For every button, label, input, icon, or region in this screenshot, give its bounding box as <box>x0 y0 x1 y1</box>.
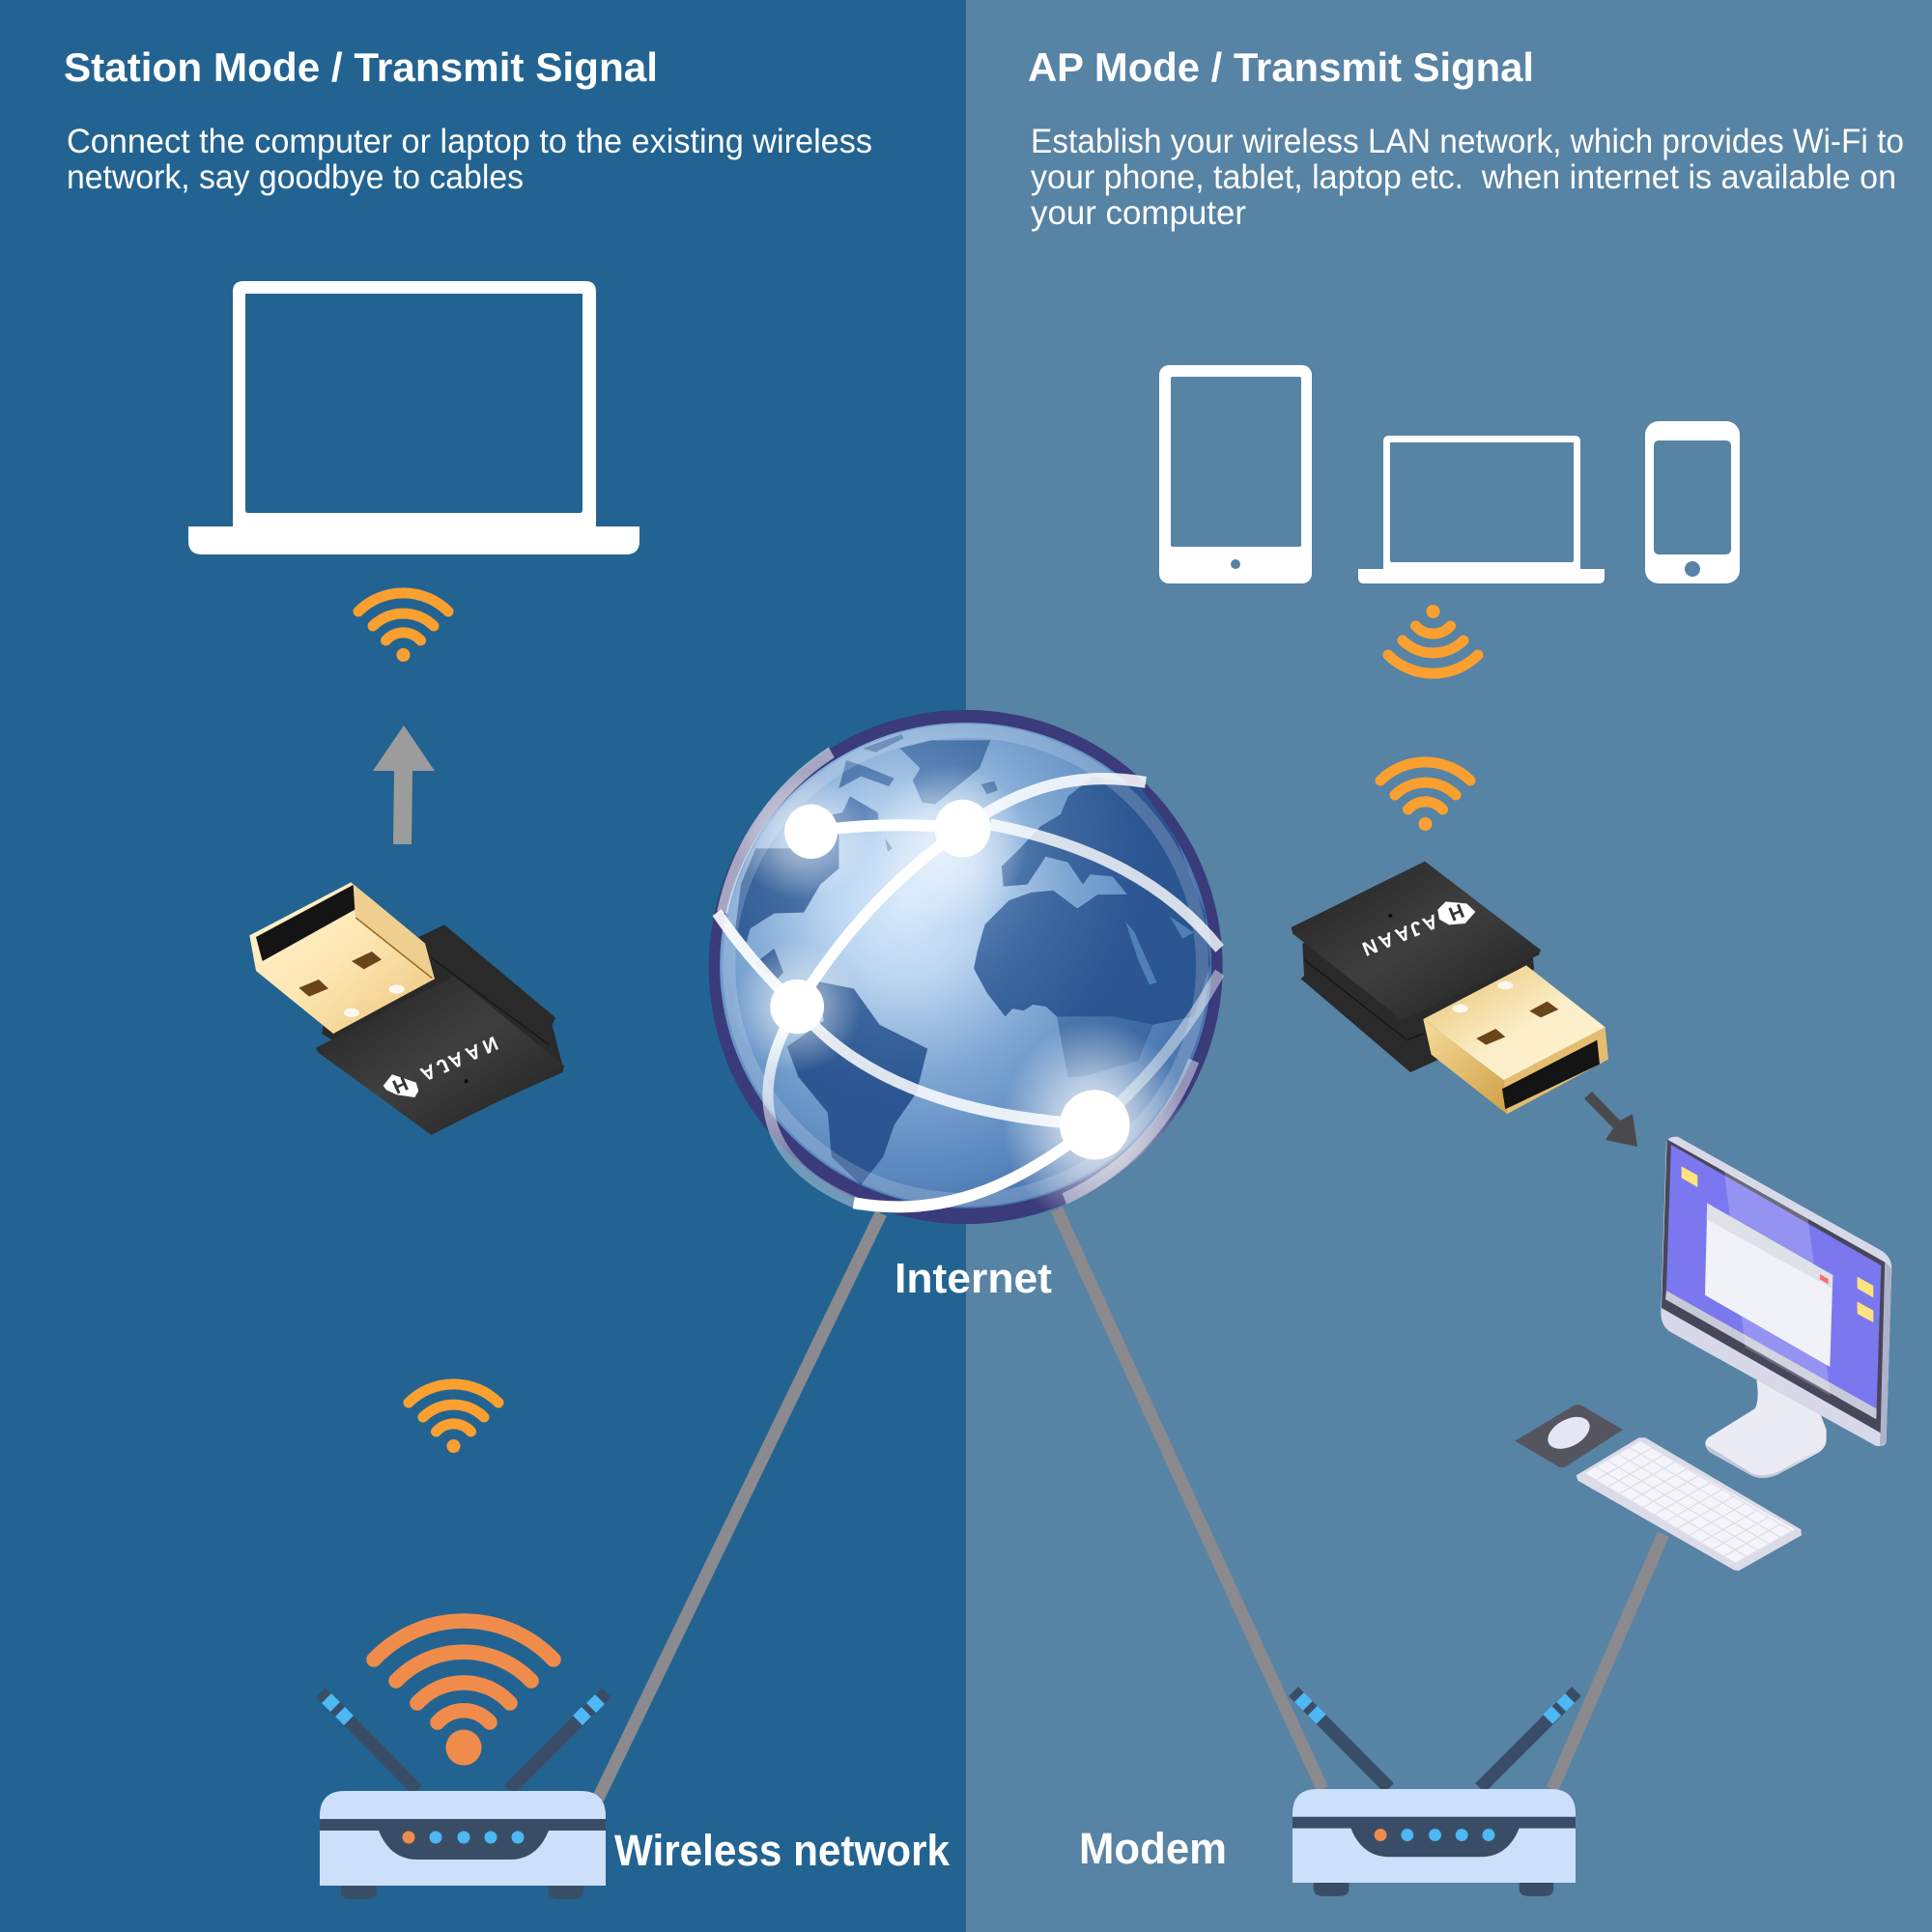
globe sea <box>720 723 1211 1208</box>
glass ring <box>729 731 1203 1200</box>
icon: modem <box>1293 1691 1577 1896</box>
router antennas <box>321 1692 607 1790</box>
mouse pad <box>1515 1405 1623 1467</box>
label: wireless network: Wireless network <box>614 1826 951 1875</box>
dongle top face <box>316 977 564 1135</box>
icon: large laptop <box>188 281 639 554</box>
dongle body side <box>1301 905 1534 1072</box>
text block: AP mode description <box>1031 123 1904 232</box>
icon: AP mode USB dongle <box>1292 862 1608 1114</box>
heading: AP mode: AP Mode / Transmit Signal <box>1028 44 1534 90</box>
icon: internet globe <box>709 710 1223 1229</box>
connection lines to the internet and modem <box>598 1209 1663 1799</box>
globe rim <box>709 710 1223 1224</box>
icon: wifi inverted below devices <box>1388 605 1478 673</box>
icon: wifi above AP dongle <box>1380 762 1470 831</box>
heading: station mode: Station Mode / Transmit Signal <box>64 44 658 90</box>
router feet <box>341 1884 583 1899</box>
USB plug <box>1423 965 1608 1114</box>
network links <box>717 779 1220 1207</box>
monitor bezel <box>1662 1139 1885 1433</box>
screen reflection <box>1724 1171 1831 1396</box>
icon: computer set <box>1515 1137 1891 1571</box>
text block: station mode description: Connect the computer or laptop to the existing wireless <box>67 123 872 160</box>
modem panel <box>1293 1817 1576 1857</box>
USB plug <box>249 882 435 1034</box>
icon: wireless router <box>320 1692 607 1899</box>
dongle brand logo: HAJAAN <box>389 1032 501 1097</box>
icon: wifi below station dongle <box>409 1384 498 1453</box>
icon: large orange wifi <box>374 1621 554 1766</box>
panel: station mode background <box>0 0 966 1932</box>
text block: AP mode description: Establish your wireless LAN network, which provides Wi-Fi to <box>1031 123 1904 160</box>
monitor screen <box>1666 1145 1881 1408</box>
modem feet <box>1314 1881 1553 1896</box>
monitor lower strip <box>1665 1291 1877 1419</box>
arrow: dongle into computer <box>1584 1092 1637 1147</box>
node glows <box>732 764 1187 1229</box>
continents <box>735 734 1210 1185</box>
monitor frame <box>1661 1137 1891 1446</box>
text block: AP mode description: your phone, tablet, laptop etc. when internet is available on <box>1031 158 1896 196</box>
arrow: up to laptop <box>373 725 435 844</box>
desktop folders <box>1682 1166 1873 1322</box>
rim highlights <box>723 753 1194 1199</box>
icon: small laptop <box>1358 436 1605 583</box>
label: modem: Modem <box>1079 1824 1227 1873</box>
icon: wifi above station dongle <box>358 593 448 662</box>
network nodes <box>770 800 1130 1159</box>
dongle brand logo: HAJAAN <box>1359 899 1467 960</box>
keyboard <box>1577 1437 1802 1571</box>
dongle body side <box>322 924 563 1108</box>
modem lights <box>1375 1829 1494 1841</box>
router body <box>320 1791 606 1886</box>
icon: tablet <box>1159 365 1312 583</box>
text block: station mode description <box>67 123 872 196</box>
app window <box>1705 1204 1833 1367</box>
icon: phone <box>1645 421 1740 583</box>
router panel <box>320 1819 606 1860</box>
modem body <box>1293 1789 1576 1883</box>
text block: AP mode description: your computer <box>1031 194 1246 232</box>
label: internet: Internet <box>895 1255 1052 1302</box>
monitor stand <box>1705 1379 1827 1478</box>
text block: station mode description: network, say goodbye to cables <box>67 158 524 196</box>
mouse <box>1543 1410 1595 1456</box>
icon: station mode USB dongle <box>249 882 564 1135</box>
modem antennas <box>1293 1691 1577 1788</box>
panel: AP mode background <box>966 0 1932 1932</box>
router lights <box>402 1832 524 1843</box>
dongle top face <box>1292 862 1541 1020</box>
